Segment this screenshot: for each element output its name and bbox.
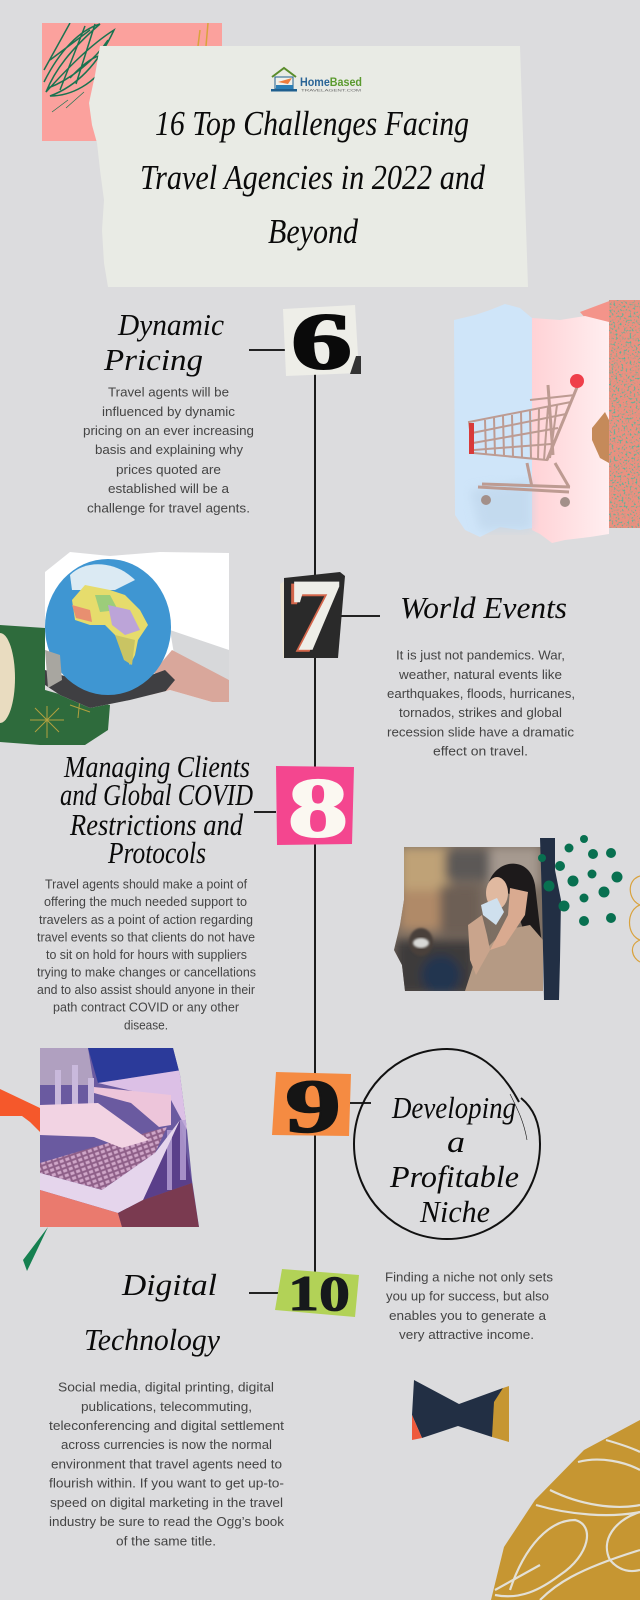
body text: effect on travel.: [433, 744, 528, 758]
title: Beyond: [268, 212, 358, 251]
right body text: [385, 1270, 553, 1342]
number tile 9: [272, 1065, 351, 1149]
logo: HomeBased: [300, 77, 362, 89]
number tile 8: 8: [288, 761, 348, 855]
hand-drawn circle: [354, 1049, 540, 1239]
heading: [84, 1267, 220, 1357]
image: woman with mask: [394, 847, 544, 995]
body text: travelers as a point of action regarding: [39, 912, 253, 927]
title: Travel Agencies in 2022 and: [140, 158, 485, 197]
paper sheet: [89, 46, 528, 287]
body text: Travel agents will be: [108, 384, 229, 400]
green dots: [538, 835, 622, 926]
body text: challenge for travel agents.: [87, 500, 250, 516]
section 7: world events: [0, 550, 575, 758]
body text: path contract COVID or any other: [53, 1000, 240, 1014]
heading: and Global COVID: [60, 777, 253, 812]
body text: pricing on an ever increasing: [83, 423, 254, 438]
logo: TRAVELAGENT.COM: [301, 88, 361, 92]
number tile 6: [283, 298, 361, 386]
pink note with green scribble: [42, 23, 222, 141]
heading: Niche: [419, 1194, 490, 1229]
right body text: Finding a niche not only sets: [385, 1270, 553, 1284]
number tile 6: 6: [291, 298, 352, 386]
timeline spine: [314, 370, 316, 1275]
heading: Restrictions and: [69, 807, 243, 842]
connector: [249, 1292, 280, 1294]
body text: travel events so that clients do not have: [37, 930, 255, 944]
left body text: flourish within. If you want to get up-to-: [49, 1476, 284, 1490]
number tile 8: [276, 761, 354, 855]
body text: basis and explaining why: [95, 442, 244, 457]
body text: weather, natural events like: [398, 667, 562, 682]
image: shopping cart collage: [454, 300, 640, 543]
body text: offering the much needed support to: [44, 894, 247, 909]
number tile 9: 9: [285, 1065, 341, 1149]
heading: [60, 749, 253, 870]
number tile 10: 10: [288, 1265, 350, 1321]
shape: navy bow: [412, 1380, 509, 1442]
heading: Profitable: [389, 1159, 519, 1194]
heading: [103, 307, 224, 377]
left body text: teleconferencing and digital settlement: [49, 1418, 284, 1433]
body text: earthquakes, floods, hurricanes,: [387, 686, 575, 701]
left body text: publications, telecommuting,: [81, 1399, 252, 1414]
number tile 7: 7: [289, 559, 341, 672]
body text: to sit on hold for hours with suppliers: [46, 947, 247, 962]
body text: [83, 384, 254, 516]
section 10: digital technology: [49, 1265, 640, 1600]
section 9: profitable niche: [0, 1048, 540, 1271]
section 6: dynamic pricing: [83, 298, 640, 543]
icon: house: [271, 68, 297, 92]
title: 16 Top Challenges Facing: [155, 104, 469, 143]
logo: [271, 68, 362, 92]
heading: [389, 1090, 519, 1229]
body text: [37, 876, 256, 1032]
heading: Pricing: [103, 342, 203, 377]
right body text: enables you to generate a: [389, 1308, 547, 1323]
gold scribble: [630, 876, 640, 962]
left body text: across currencies is now the normal: [61, 1437, 272, 1452]
number tile 10: [275, 1265, 359, 1321]
heading: Digital: [121, 1267, 217, 1302]
body text: recession slide have a dramatic: [387, 724, 575, 740]
body text: It is just not pandemics. War,: [396, 648, 565, 662]
heading: Technology: [84, 1322, 220, 1357]
heading: Protocols: [107, 835, 206, 870]
section 8: managing clients: [37, 749, 640, 1032]
image: globe on green blob: [0, 550, 229, 745]
body text: and to also assist should anyone in their: [37, 982, 256, 997]
heading: Managing Clients: [63, 749, 250, 784]
left body text: environment that travel agents need to: [51, 1456, 282, 1472]
image: laptop collage: [0, 1048, 200, 1271]
number tile 7: 7: [286, 561, 338, 674]
cart: [469, 380, 580, 492]
left body text: Social media, digital printing, digital: [58, 1380, 274, 1394]
right body text: you up for success, but also: [386, 1288, 549, 1304]
body text: Travel agents should make a point of: [45, 876, 247, 892]
left body text: [49, 1380, 285, 1548]
navy strip: [540, 838, 561, 1000]
connector: [254, 811, 276, 813]
connector: [350, 1102, 371, 1104]
left body text: industry be sure to read the Ogg’s book: [49, 1514, 285, 1529]
connector: [249, 349, 286, 351]
connector: [341, 615, 380, 617]
body text: trying to make changes or cancellations: [37, 964, 256, 980]
body text: tornados, strikes and global: [399, 705, 562, 720]
body text: established will be a: [108, 481, 230, 496]
title: [140, 104, 485, 251]
shape: gold blob with white scribbles: [491, 1420, 640, 1600]
right body text: very attractive income.: [399, 1327, 534, 1342]
body text: prices quoted are: [116, 462, 221, 477]
header: torn paper with pink note: [42, 23, 528, 287]
left body text: of the same title.: [116, 1534, 216, 1548]
heading: a: [447, 1124, 465, 1159]
heading: Developing: [391, 1090, 516, 1125]
heading: World Events: [400, 590, 567, 625]
body text: [387, 648, 575, 758]
body text: influenced by dynamic: [102, 404, 236, 419]
left body text: speed on digital marketing in the travel: [50, 1495, 283, 1510]
heading: Dynamic: [117, 307, 224, 342]
body text: disease.: [124, 1018, 168, 1032]
